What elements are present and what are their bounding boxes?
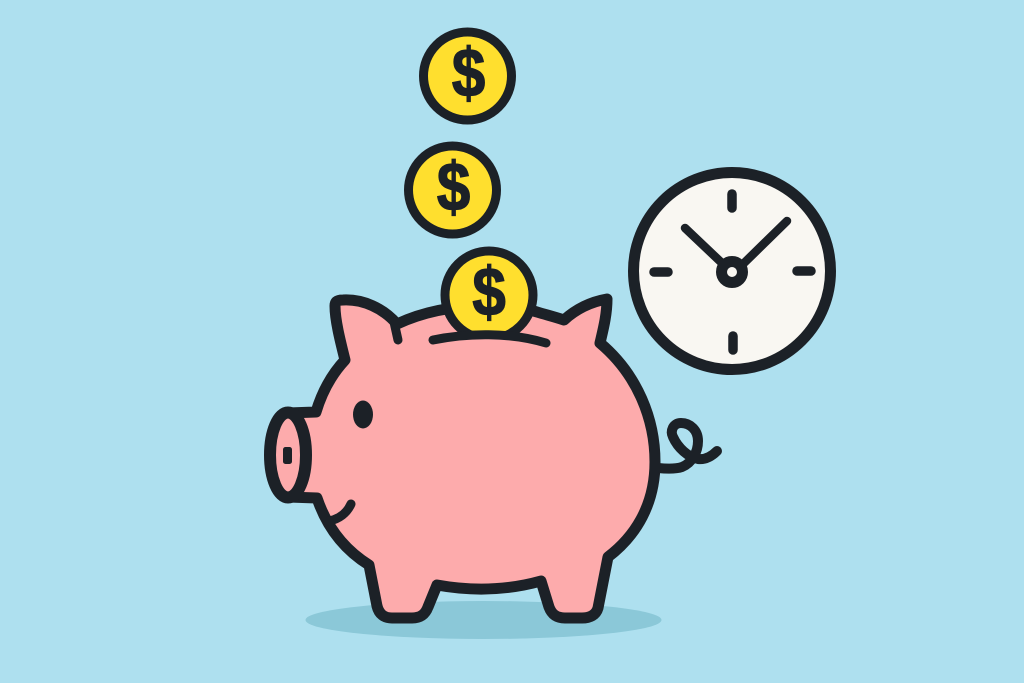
- coin top: $: [452, 35, 485, 111]
- pig body: [288, 299, 655, 618]
- snout nostril: [283, 447, 292, 464]
- pig smile: [329, 504, 351, 521]
- coin slot: [433, 335, 546, 343]
- coin middle: [408, 146, 496, 234]
- ground shadow: [306, 601, 662, 639]
- clock center: [722, 262, 742, 282]
- coin middle: $: [437, 149, 470, 225]
- coin in slot: $: [472, 254, 506, 330]
- ear crease left: [394, 322, 398, 340]
- coin in slot: [445, 251, 533, 339]
- clock tick marks: [654, 194, 811, 350]
- icon: clock: [634, 172, 830, 370]
- coin top: [424, 32, 512, 120]
- pig snout: [270, 412, 306, 498]
- icon: piggy bank: [270, 299, 717, 618]
- clock hands: [685, 221, 787, 266]
- pig tail: [658, 423, 717, 469]
- pig eye: [353, 400, 373, 428]
